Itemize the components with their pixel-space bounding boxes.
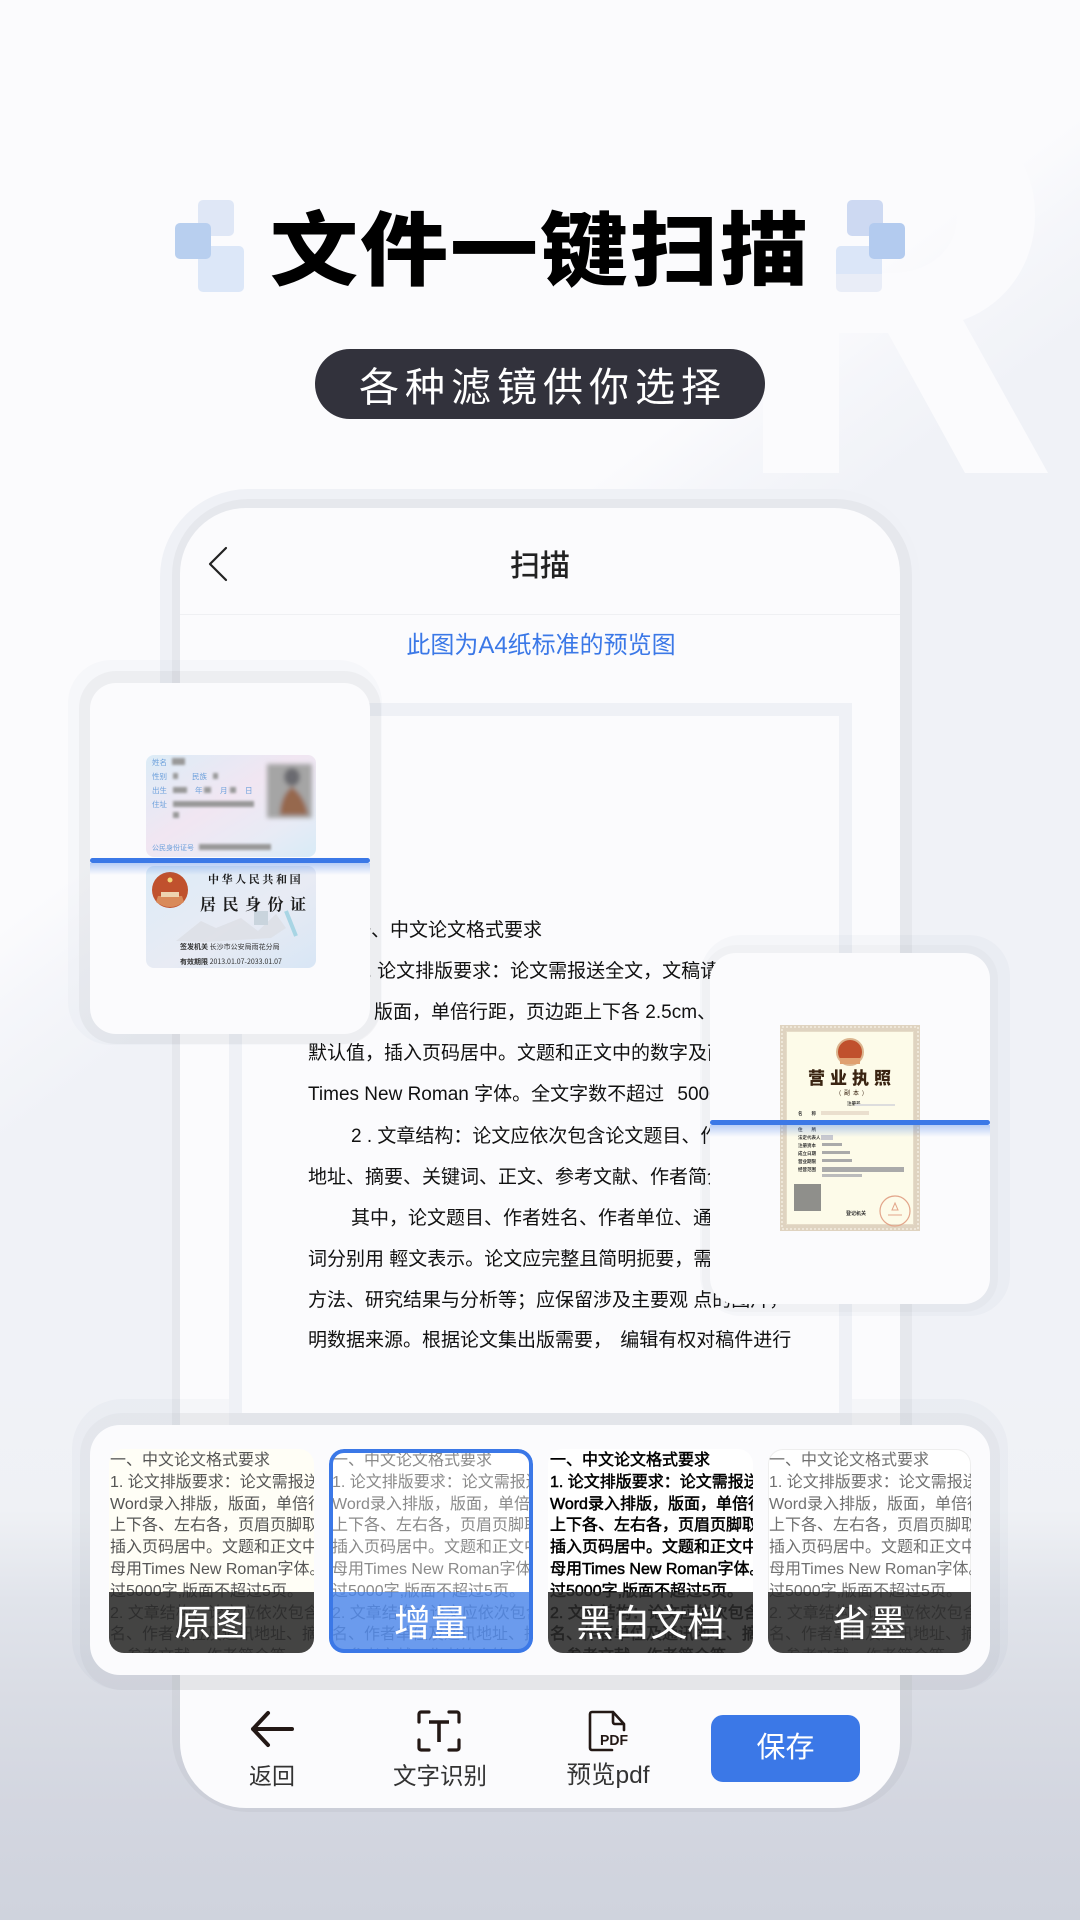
filter thumbnail: enhanced selected: 过5000字,版面不超过5页。 xyxy=(332,1583,525,1600)
ID card front: 公民身份证号 xyxy=(152,843,194,853)
document text: 其中，论文题目、作者姓名、作者单位、通讯 xyxy=(351,1208,731,1229)
subtitle pill xyxy=(315,349,765,419)
document text xyxy=(308,920,791,1351)
business license: 营业执照 xyxy=(808,1064,896,1089)
scan line glow xyxy=(710,1125,990,1137)
business license: 登记机关 xyxy=(846,1210,866,1217)
business license: 营业期限 xyxy=(798,1158,816,1165)
document text: 地址、摘要、关键词、正文、参考文献、作者简介 xyxy=(308,1167,726,1188)
left title decoration xyxy=(175,200,244,292)
filter thumbnail: enhanced selected xyxy=(329,1449,533,1653)
ID card back: 有效期限 2013.01.07-2033.01.07 xyxy=(180,957,282,967)
ID card front: 性别 xyxy=(152,771,167,782)
icon: pdf file: PDF xyxy=(600,1733,628,1749)
filter thumbnail: original: 一、中文论文格式要求 xyxy=(110,1452,270,1469)
filter thumbnail: original: 名、作者单位及通讯地址、摘 xyxy=(110,1626,314,1643)
filter panel band inside phone bottom xyxy=(180,1675,900,1690)
filter panel inner halo xyxy=(80,1413,1000,1690)
save button xyxy=(711,1715,860,1782)
filter thumbnail: ink saving: 过5000字,版面不超过5页。 xyxy=(769,1583,962,1600)
ID card back xyxy=(146,866,316,968)
ID card back: 中华人民共和国 xyxy=(208,871,303,887)
document text: 默认值，插入页码居中。文题和正文中的数字及西文 xyxy=(308,1043,745,1064)
filter thumbnail: original: 原图 xyxy=(174,1603,248,1644)
filter thumbnail: black and white: 过5000字,版面不超过5页。 xyxy=(550,1583,743,1600)
filter thumbnail: ink saving: 名、作者单位及通讯地址、摘 xyxy=(769,1626,971,1643)
filter thumbnail: ink saving: 插入页码居中。文题和正文中 xyxy=(769,1539,971,1556)
right title decoration xyxy=(836,200,905,292)
phone mockup xyxy=(180,508,900,1808)
business license: 注册号 xyxy=(847,1100,861,1107)
business license: 成立日期 xyxy=(798,1150,816,1157)
floating card: ID card scan xyxy=(90,683,370,1034)
filter thumbnail: ink saving: 一、中文论文格式要求 xyxy=(769,1452,929,1469)
filter thumbnail: black and white: 黑白文档 xyxy=(576,1603,724,1644)
filter thumbnail: black and white: 上下各、左右各，页眉页脚取 xyxy=(550,1517,753,1534)
filter thumbnail: original: 上下各、左右各，页眉页脚取 xyxy=(110,1517,314,1534)
filter thumbnail: black and white xyxy=(548,1449,753,1653)
filter thumbnail: original: 2. 文章结构：论文应依次包含 xyxy=(110,1605,314,1622)
icon: text recognition xyxy=(417,1710,461,1752)
floating card: business license scan xyxy=(710,953,990,1304)
ID card back: 签发机关 长沙市公安局雨花分局 xyxy=(180,942,280,952)
title: 文件一键扫描 xyxy=(270,186,810,303)
background lower shading xyxy=(0,1380,1080,1920)
business license: 住 所 xyxy=(798,1126,816,1133)
filter thumbnail: enhanced selected: 一、中文论文格式要求 xyxy=(332,1452,492,1469)
phone inner halo xyxy=(172,499,912,1812)
filter thumbnail: black and white: 名、作者单位及通讯地址、摘 xyxy=(550,1626,753,1643)
icon: back arrow xyxy=(250,1710,294,1748)
label: preview pdf: 预览pdf xyxy=(566,1762,650,1789)
filter thumbnail: original: 插入页码居中。文题和正文中 xyxy=(110,1539,314,1556)
ID card front: 姓名 xyxy=(152,757,167,768)
phone header title: 扫描 xyxy=(510,541,570,585)
document text: 版面，单倍行距，页边距上下各 2.5cm、左右 xyxy=(374,1002,754,1023)
document paper xyxy=(242,716,839,1413)
scan line xyxy=(710,1120,990,1125)
document text: 词分别用 輕文表示。论文应完整且简明扼要，需 xyxy=(308,1249,712,1270)
document text: 明数据来源。根据论文集出版需要， 编辑有权对稿件进行 xyxy=(308,1330,791,1351)
ID card back: 居民身份证 xyxy=(200,892,313,915)
filter panel band inside phone top xyxy=(180,1413,900,1425)
subtitle pill: 各种滤镜供你选择 xyxy=(359,355,727,413)
watermark letter R xyxy=(802,342,1048,473)
business license: 名 称 xyxy=(798,1110,816,1117)
document text: 2 . 文章结构：论文应依次包含论文题目、作者 xyxy=(351,1126,738,1147)
ID card front: 日 xyxy=(245,785,252,796)
business license: 注册资本 xyxy=(798,1142,816,1149)
ID card front: 月 xyxy=(220,785,228,796)
back chevron xyxy=(208,546,228,582)
filter thumbnail: original xyxy=(109,1449,314,1653)
phone header divider xyxy=(180,614,900,615)
ID card front: 住址 xyxy=(152,799,167,810)
filter thumbnail: enhanced selected: 增量 xyxy=(394,1603,468,1644)
document text: 一、中文论文格式要求 xyxy=(352,920,542,941)
ID card front xyxy=(146,755,316,857)
label: back: 返回 xyxy=(249,1763,295,1789)
filter thumbnail: original: 过5000字,版面不超过5页。 xyxy=(110,1583,303,1600)
business license: (副本) xyxy=(839,1088,867,1097)
filter thumbnail: black and white: 插入页码居中。文题和正文中 xyxy=(550,1539,753,1556)
business license: 法定代表人 xyxy=(798,1134,821,1141)
scan line glow xyxy=(90,863,370,875)
save button: 保存 xyxy=(756,1732,814,1764)
filter thumbnail: ink saving xyxy=(768,1449,971,1653)
filter thumbnail: ink saving: 省墨 xyxy=(832,1603,906,1644)
icon: pdf file xyxy=(588,1710,628,1752)
scan line xyxy=(90,858,370,863)
label: text recognition: 文字识别 xyxy=(393,1763,487,1789)
business license: 经营范围 xyxy=(798,1166,816,1173)
preview hint: 此图为A4纸标准的预览图 xyxy=(406,632,676,659)
filter panel outer halo xyxy=(72,1399,1008,1690)
filter thumbnail: ink saving: 上下各、左右各，页眉页脚取 xyxy=(769,1517,971,1534)
ID card front: 出生 xyxy=(152,785,167,796)
ID card front: 民族 xyxy=(192,771,207,782)
document text: Times New Roman 字体。全文字数不超过 5000 字 xyxy=(308,1084,744,1105)
filter thumbnail: black and white: 一、中文论文格式要求 xyxy=(550,1452,710,1469)
document text: 方法、研究结果与分析等；应保留涉及主要观 点的图片， xyxy=(308,1290,788,1311)
document text: 1. 论文排版要求：论文需报送全文，文稿请 xyxy=(356,961,719,982)
filter panel xyxy=(90,1425,990,1675)
phone outer halo xyxy=(160,489,920,1827)
business license xyxy=(780,1025,920,1231)
ID card front: 年 xyxy=(195,785,203,796)
